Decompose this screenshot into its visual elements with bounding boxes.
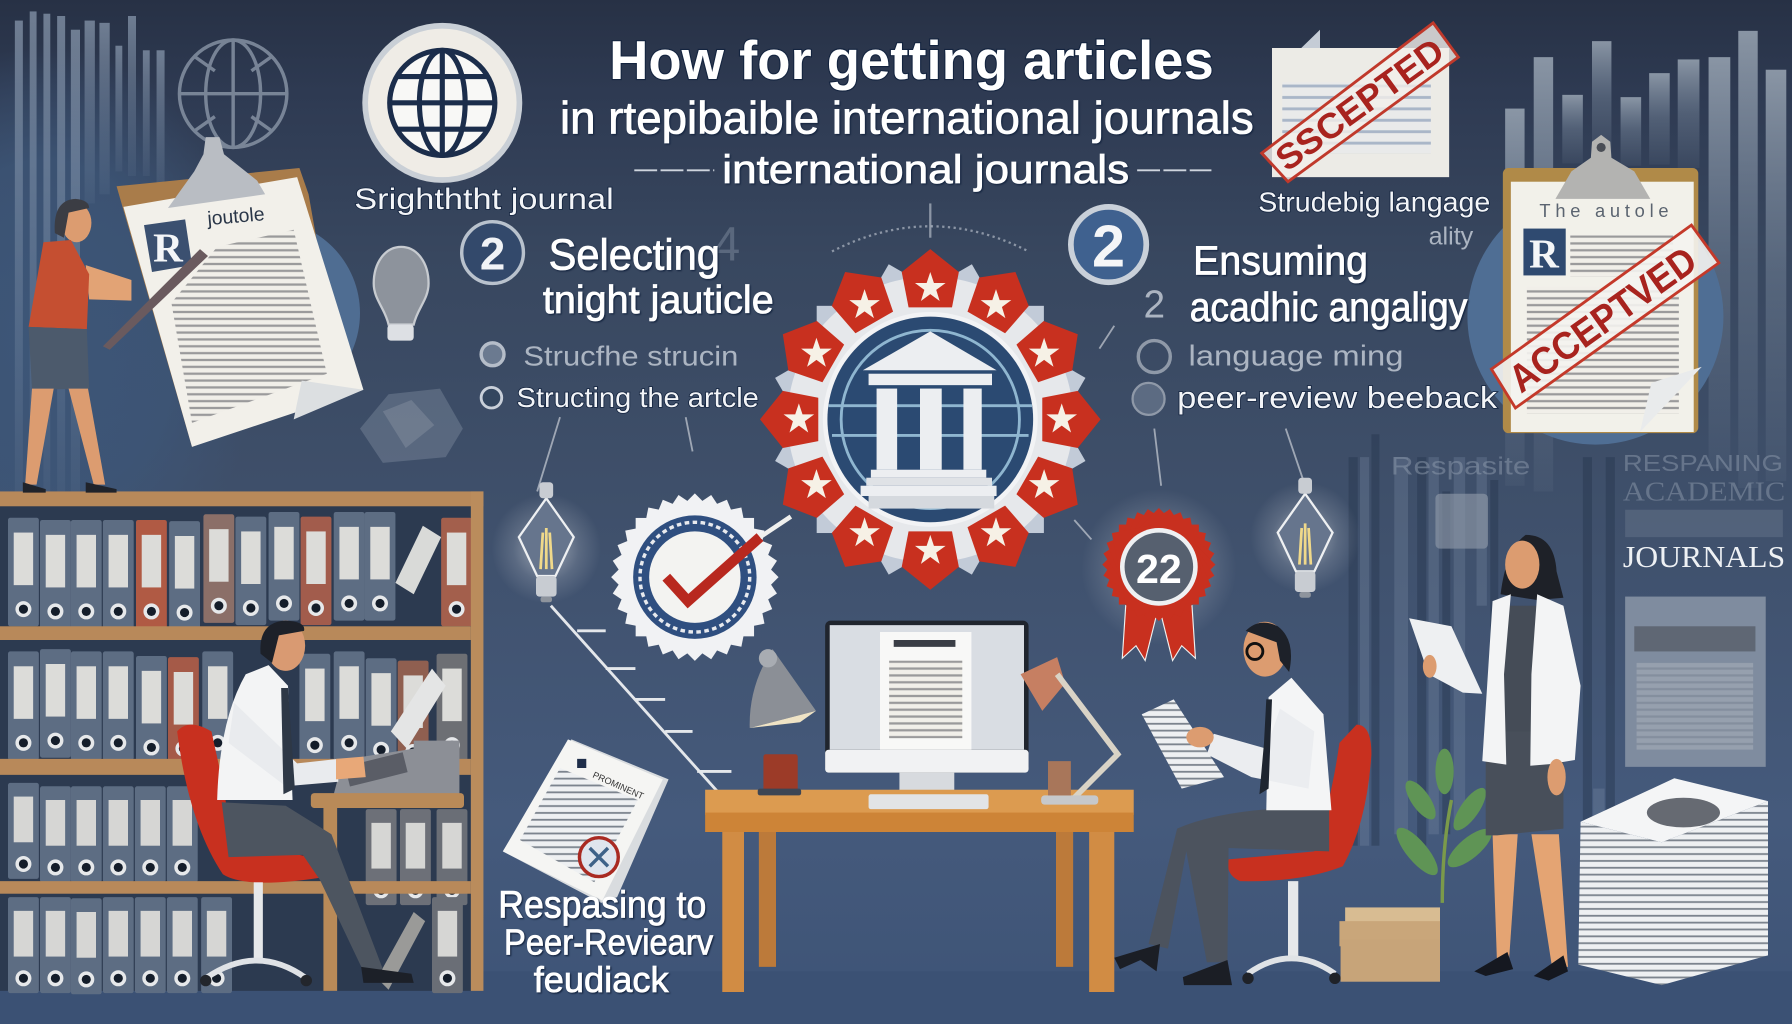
person: woman with pen [23,199,208,493]
center seal [760,249,1101,590]
faint wall labels: Respasite [1391,452,1530,480]
right clipboard: ACCEPTVED [1501,239,1705,401]
red chair [177,725,320,986]
label: responding to feedback [498,884,714,1000]
right wall stripes [1349,434,1615,846]
plant [1390,749,1497,903]
person: woman in white coat [1409,535,1581,981]
faint number 4 and arc [714,203,1029,272]
left clipboard: R [153,225,184,271]
ribbon badge 22: 22 [1136,546,1182,592]
number badge left [462,222,523,283]
heading: ensuring: Ensuming [1193,237,1368,283]
label: responding to feedback: Respasing to [498,884,706,926]
document [1142,699,1224,789]
heading: ensuring: acadhic angaligy [1190,284,1468,330]
dress top [1497,606,1543,731]
icon: globe disc [362,23,522,183]
typewriter [334,741,459,794]
icon: light bulb upper [374,247,429,341]
icon: faint wall device [1435,494,1488,549]
stairs [551,606,731,794]
connector strokes [537,326,1305,539]
icon: faint globe top left [179,40,287,147]
label: structuring language: Strudebig langage [1258,186,1490,217]
person: man reading [1114,622,1371,985]
faint wall labels: RESPANING [1623,450,1783,476]
left wall stripes [15,11,165,491]
skirt [1486,717,1563,835]
number badge right: 2 [1092,212,1125,279]
binders row 4 [8,897,463,994]
shirt [1266,678,1331,810]
shirt [217,665,293,800]
icon: light bulb right [1278,478,1333,598]
document with seal [503,739,669,903]
mug [758,754,801,795]
number badge left: 2 [480,229,505,280]
label: responding to feedback: Peer-Reviearv [504,921,714,962]
side desk [311,793,464,991]
title: international journals [722,148,1129,192]
faint wall labels: ACADEMIC [1623,477,1785,507]
globe lines [829,330,1032,509]
label: structuring language [1258,186,1490,251]
legs [1493,834,1518,967]
cardboard boxes [1339,907,1440,982]
list: left steps [481,341,759,413]
list: left steps: Structing the artcle [517,382,759,413]
heading: ensuring [1190,237,1468,330]
heading: selecting: tnight jauticle [543,279,774,322]
list: right steps [1133,284,1498,415]
binders row 3 [8,783,467,905]
left clipboard: joutole [206,203,265,230]
right clipboard: The autole [1539,200,1669,221]
bookshelf [0,491,483,994]
check seal [611,493,791,661]
right bar chart backdrop [1505,31,1786,491]
binders row 2 [8,649,467,769]
title: How for getting articles [609,29,1214,91]
trousers [1149,809,1329,962]
glow left bulb [491,494,601,603]
computer monitor [825,621,1029,791]
trousers [222,802,383,971]
stars [784,272,1077,564]
document with seal: PROMINENT [591,770,646,801]
head [1243,622,1287,677]
blue disc behind left clipboard [173,219,360,407]
red tabs [760,249,1101,590]
left clipboard [117,137,363,447]
title [560,29,1254,192]
list: right steps: language ming [1189,341,1403,373]
title: in rtepibaible international journals [560,93,1254,144]
head [266,621,305,671]
label: structuring language: ality [1429,223,1474,251]
icon: light bulb left [519,482,574,602]
poster [1625,597,1766,767]
document with stamp top right: SSCEPTED [1268,30,1452,179]
icon: temple [861,331,997,509]
right clipboard: R [1529,230,1560,276]
paper on typewriter [391,669,446,749]
desk lamp right [1021,657,1118,805]
right clipboard [1491,135,1719,433]
blue disc behind right clipboard [1467,189,1723,445]
document [1409,618,1482,694]
red chair [1228,725,1371,984]
heading: selecting: Selecting [549,232,720,280]
list: right steps: peer-review beeback [1177,380,1498,415]
main desk [705,790,1134,992]
keyboard [869,794,989,809]
icon: desk lamp grey [750,649,816,728]
number badge right [1071,207,1146,282]
paper stack [1578,778,1768,985]
person: man at typewriter [177,621,414,986]
label: journals: JOURNALS [1623,540,1785,574]
faint number 4 and arc: 4 [714,219,740,272]
glow right bulb [1250,482,1360,592]
list: left steps: Strucfhe strucin [523,341,738,372]
label: right journal: Srighththt journal [354,183,614,216]
coat [1482,594,1511,765]
label: responding to feedback: feudiack [534,959,669,1000]
heading: selecting [543,232,774,322]
ribbon badge 22 [1081,489,1237,661]
faint crumpled paper [360,389,463,463]
binders row 1 [8,512,472,630]
faint wall labels [1391,450,1785,537]
list: right steps: 2 [1143,284,1165,327]
